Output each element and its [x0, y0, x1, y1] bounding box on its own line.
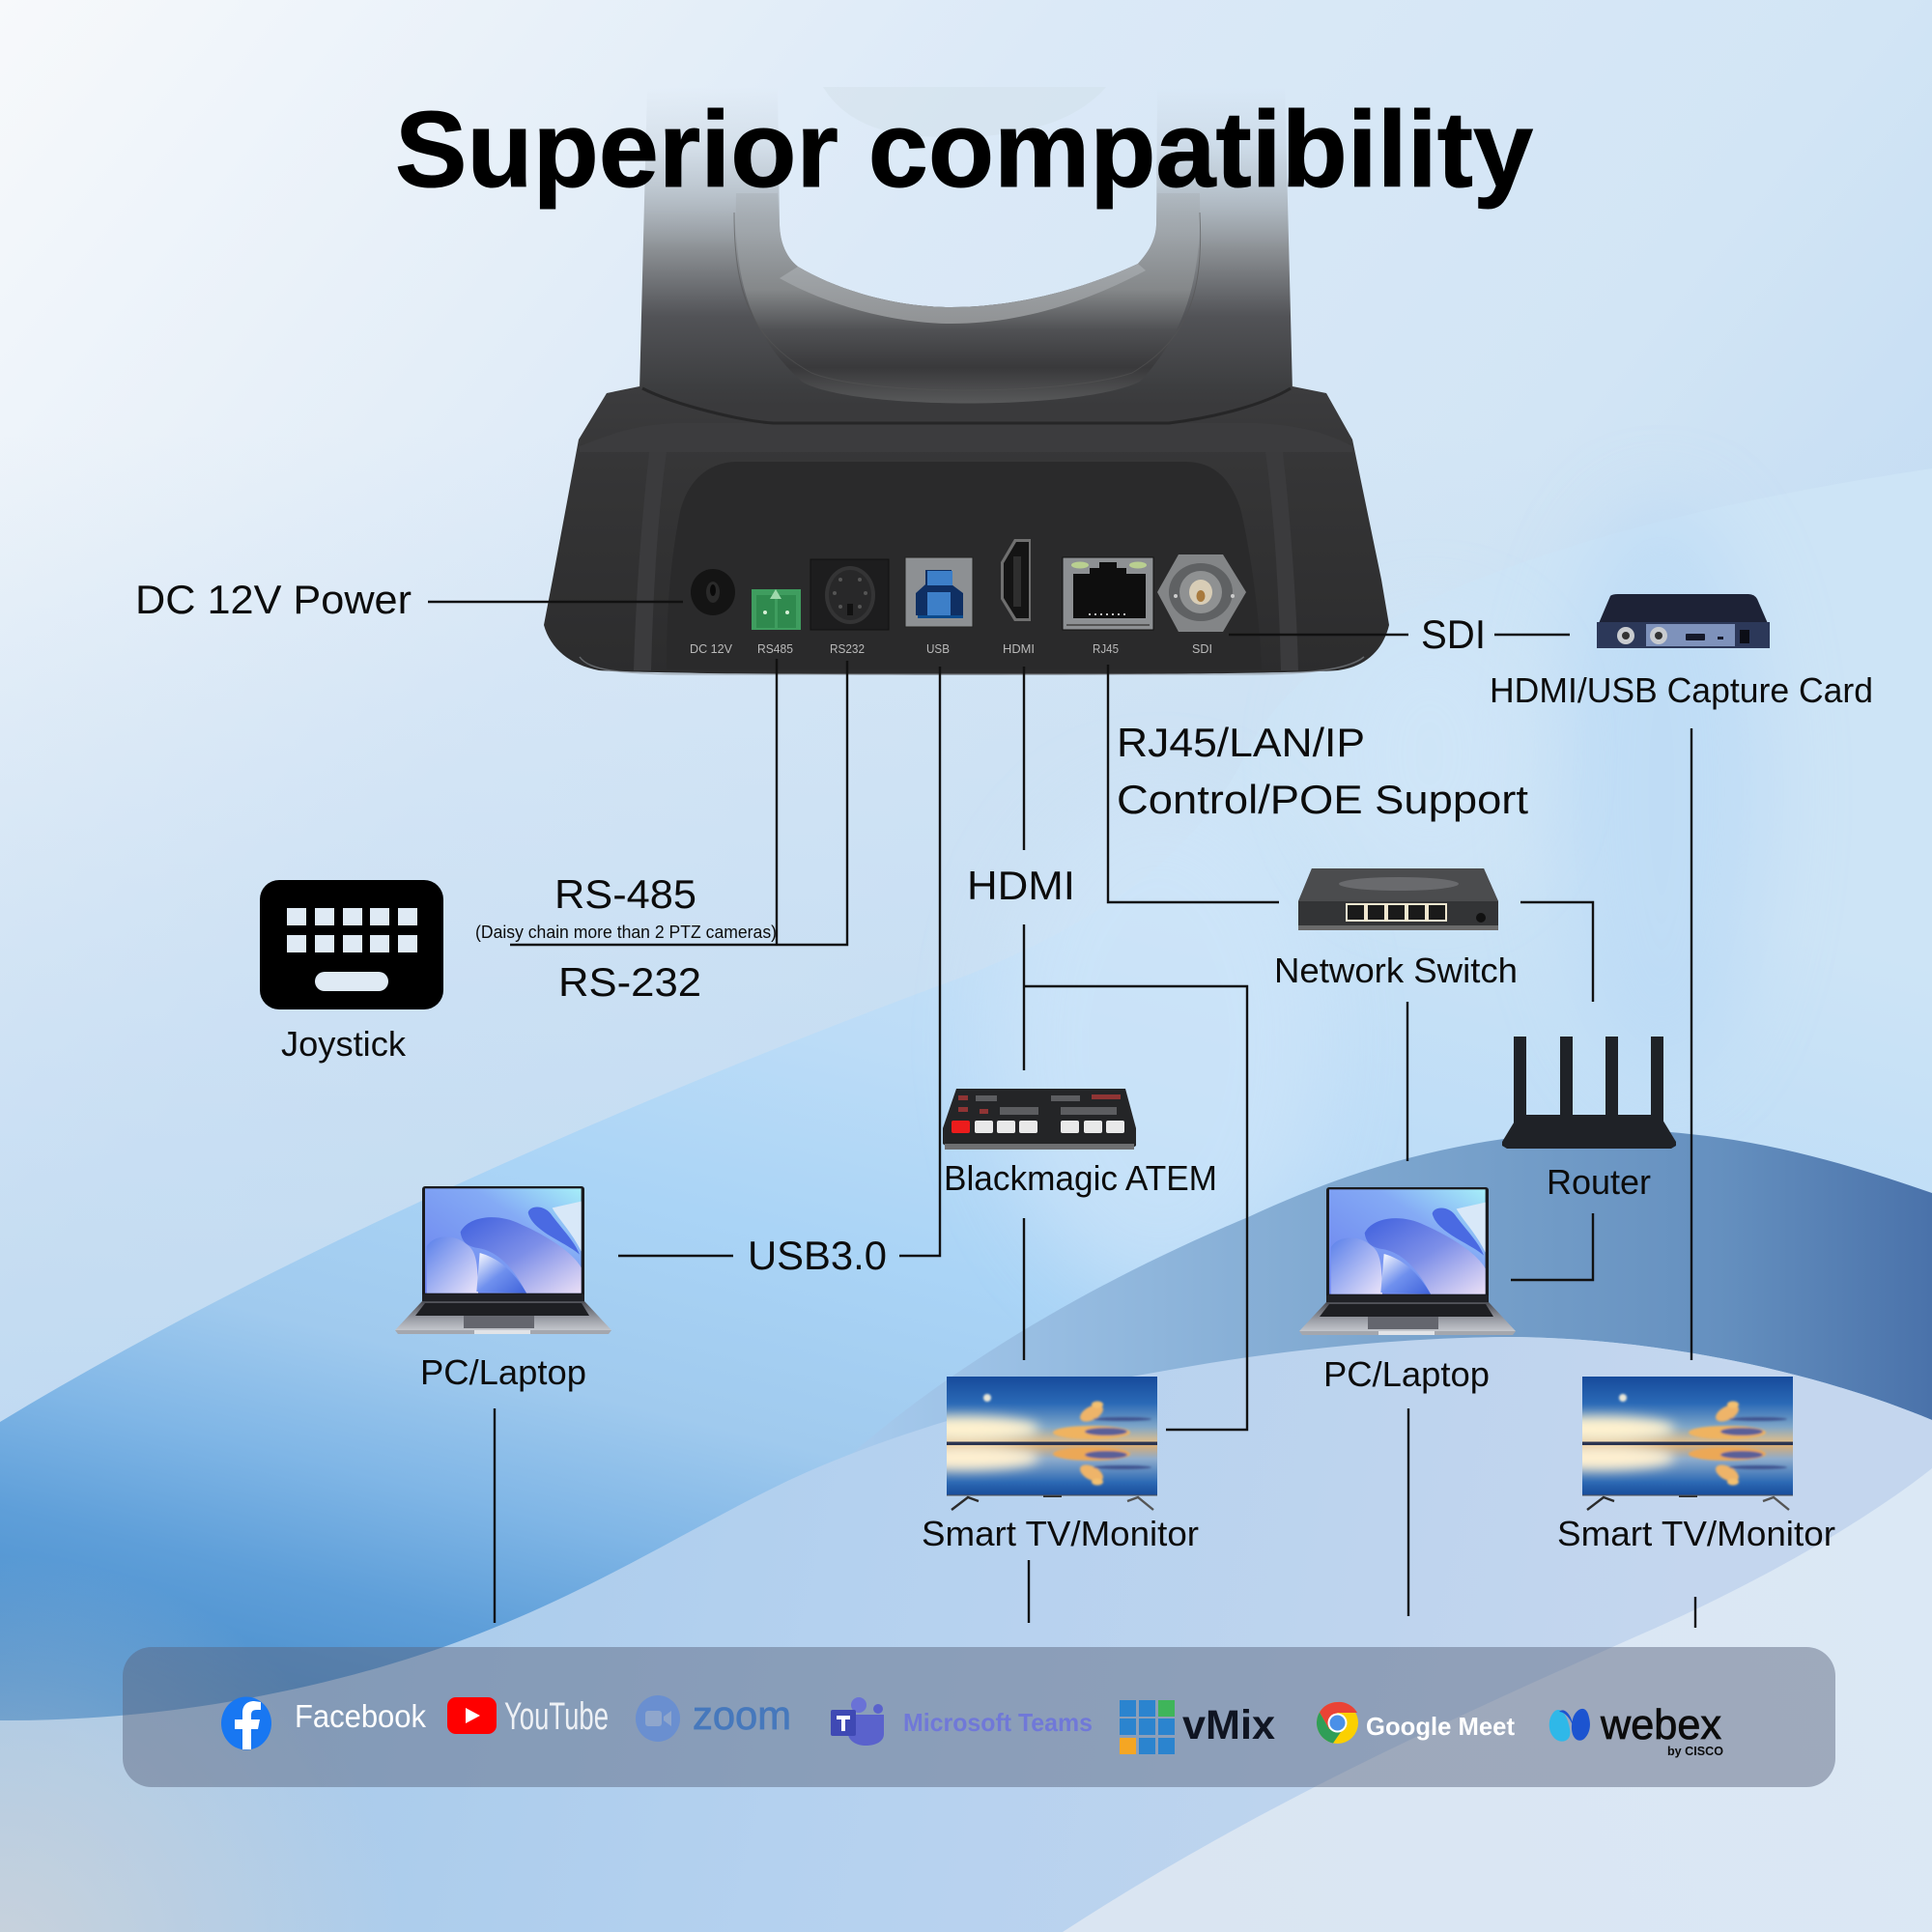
- logo: Zoom: zoom: [693, 1692, 791, 1738]
- label: USB3.0: USB3.0: [748, 1233, 887, 1278]
- label: RJ45/LAN/IP Control/POE Support: RJ45/LAN/IP: [1117, 720, 1365, 765]
- label: PC/Laptop left: PC/Laptop: [420, 1352, 586, 1392]
- logo: Facebook: Facebook: [295, 1698, 426, 1734]
- icon: TV left: [889, 1377, 1157, 1510]
- note: daisy chain: (Daisy chain more than 2 PTZ cameras): [475, 923, 777, 942]
- label: HDMI/USB Capture Card: HDMI/USB Capture Card: [1490, 670, 1873, 710]
- logo: YouTube: YouTube: [504, 1695, 609, 1738]
- logo: Google Meet: [1317, 1702, 1515, 1744]
- port labels: RS485: [757, 642, 793, 656]
- icon: router: [1502, 1037, 1676, 1149]
- port: HDMI: [1001, 539, 1031, 621]
- logo: Webex: by CISCO: [1667, 1744, 1723, 1758]
- port labels: DC 12V: [690, 642, 733, 656]
- label: PC/Laptop right: PC/Laptop: [1323, 1354, 1490, 1394]
- connector lines: [428, 602, 1695, 1628]
- icon: network switch: [1298, 868, 1498, 930]
- port labels: USB: [926, 642, 950, 656]
- icon: capture card: [1597, 594, 1770, 648]
- label: RS-232: RS-232: [558, 959, 701, 1005]
- logo: Zoom: [636, 1692, 791, 1742]
- port: RJ45: [1063, 557, 1153, 630]
- logo: Google Meet: Google Meet: [1366, 1712, 1515, 1741]
- camera base: [544, 386, 1389, 674]
- icon: TV right: [1524, 1377, 1793, 1510]
- port: SDI: [1157, 554, 1246, 632]
- label: RS-485: RS-485: [554, 871, 696, 917]
- icon: joystick keyboard: [260, 880, 443, 1009]
- port labels: SDI: [1192, 642, 1212, 656]
- label: Network Switch: Network Switch: [1274, 951, 1518, 990]
- panel: platforms: [123, 1647, 1835, 1787]
- label: HDMI: HDMI: [967, 863, 1075, 908]
- logo: vMix: [1120, 1700, 1275, 1754]
- title: Superior compatibility: [395, 90, 1533, 210]
- label: Joystick: Joystick: [281, 1024, 407, 1064]
- label: Blackmagic ATEM: Blackmagic ATEM: [944, 1158, 1217, 1198]
- port: RS232: [810, 559, 889, 630]
- logo: YouTube: [447, 1695, 609, 1738]
- icon: laptop left: [395, 1186, 611, 1334]
- label: RJ45/LAN/IP Control/POE Support: Control/POE Support: [1117, 777, 1528, 822]
- port: USB: [905, 557, 973, 627]
- icon: laptop right: [1299, 1187, 1516, 1335]
- port labels: RS232: [830, 642, 865, 656]
- label: Router: Router: [1547, 1162, 1651, 1202]
- logo: Facebook: [221, 1696, 426, 1750]
- label: SDI: SDI: [1421, 611, 1486, 657]
- label: DC 12V Power: DC 12V Power: [135, 577, 412, 622]
- logo: Webex: webex: [1600, 1701, 1721, 1748]
- port: RS485: [752, 589, 801, 630]
- logo: Webex: [1549, 1701, 1723, 1758]
- PTZ camera arm: [639, 87, 1293, 430]
- label: RJ45/LAN/IP Control/POE Support: [1117, 720, 1528, 822]
- logo: Microsoft Teams: Microsoft Teams: [903, 1708, 1093, 1737]
- port: DC 12V: [691, 569, 735, 615]
- port labels: RJ45: [1093, 642, 1119, 656]
- logo: vMix: vMix: [1182, 1702, 1275, 1748]
- icon: ATEM switcher: [943, 1089, 1136, 1150]
- port labels: HDMI: [1003, 642, 1035, 656]
- label: Smart TV/Monitor left: Smart TV/Monitor: [922, 1514, 1199, 1553]
- label: Smart TV/Monitor right: Smart TV/Monitor: [1557, 1514, 1835, 1553]
- logo: Microsoft Teams: [831, 1697, 1093, 1746]
- port labels: [690, 642, 1212, 656]
